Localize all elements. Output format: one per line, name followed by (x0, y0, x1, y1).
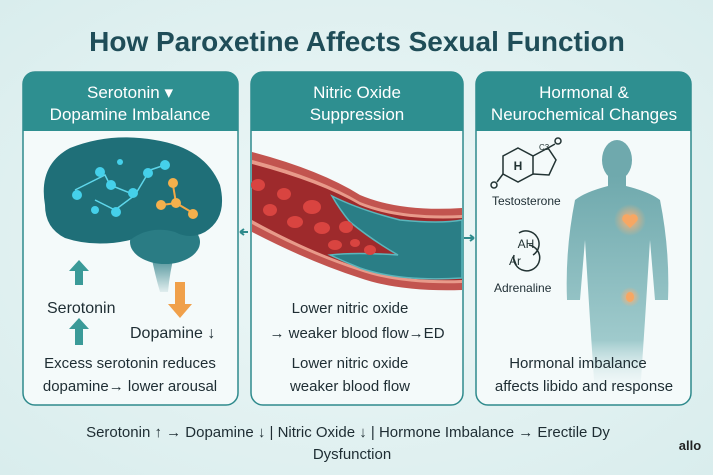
icon: blood vessel (251, 152, 462, 290)
footer summary (86, 424, 610, 463)
text: nitric description 1: Lower nitric oxide (292, 300, 408, 317)
arrow: left connector (240, 229, 248, 235)
heading: serotonin: Serotonin ▾ (87, 83, 173, 102)
panel: hormonal: Neurochemical Changes (491, 105, 677, 124)
icon: brain (44, 137, 222, 292)
panel: serotonin dopamine: Dopamine Imbalance (50, 105, 210, 124)
panel: nitric oxide: → weaker blood flow→ED (269, 325, 445, 342)
footer summary: Serotonin ↑ → Dopamine ↓ | Nitric Oxide ↓ | Hormone Imbalance → Erectile Dy (86, 424, 610, 441)
panel: serotonin dopamine: dopamine→ lower arousal (43, 378, 217, 395)
text: serotonin label: Serotonin (47, 300, 116, 317)
text: testosterone: Testosterone (492, 194, 561, 208)
title: How Paroxetine Affects Sexual Function (89, 26, 625, 57)
text: adrenaline: Adrenaline (494, 281, 552, 295)
text: dopamine label: Dopamine ↓ (130, 325, 215, 342)
icon: testosterone molecule: H (514, 159, 522, 173)
panel: hormonal (476, 72, 691, 405)
panel: nitric oxide: Suppression (310, 105, 404, 124)
panel: nitric oxide: weaker blood flow (289, 378, 410, 395)
logo: allo: allo (679, 438, 701, 453)
text: left description: Excess serotonin reduces (44, 355, 216, 372)
panel: serotonin dopamine (23, 72, 238, 405)
panel: nitric oxide (251, 72, 463, 405)
panel: hormonal: affects libido and response (495, 378, 673, 395)
heading: hormonal: Hormonal & (539, 83, 630, 102)
text: nitric description 2: Lower nitric oxide (292, 355, 408, 372)
footer summary: Dysfunction (313, 446, 391, 463)
icon: testosterone molecule (491, 138, 561, 188)
icon: human body (567, 140, 668, 395)
icon: adrenaline: AH (518, 237, 534, 251)
icon: serotonin up arrows (69, 260, 89, 345)
icon: dopamine down arrow (168, 282, 192, 318)
text: hormonal description: Hormonal imbalance (509, 355, 647, 372)
arrow: right connector (464, 235, 474, 241)
heading: nitric oxide: Nitric Oxide (313, 83, 401, 102)
icon: testosterone molecule: C3 (539, 143, 550, 152)
icon: adrenaline (509, 231, 540, 271)
icon: adrenaline: Ar (509, 254, 521, 268)
